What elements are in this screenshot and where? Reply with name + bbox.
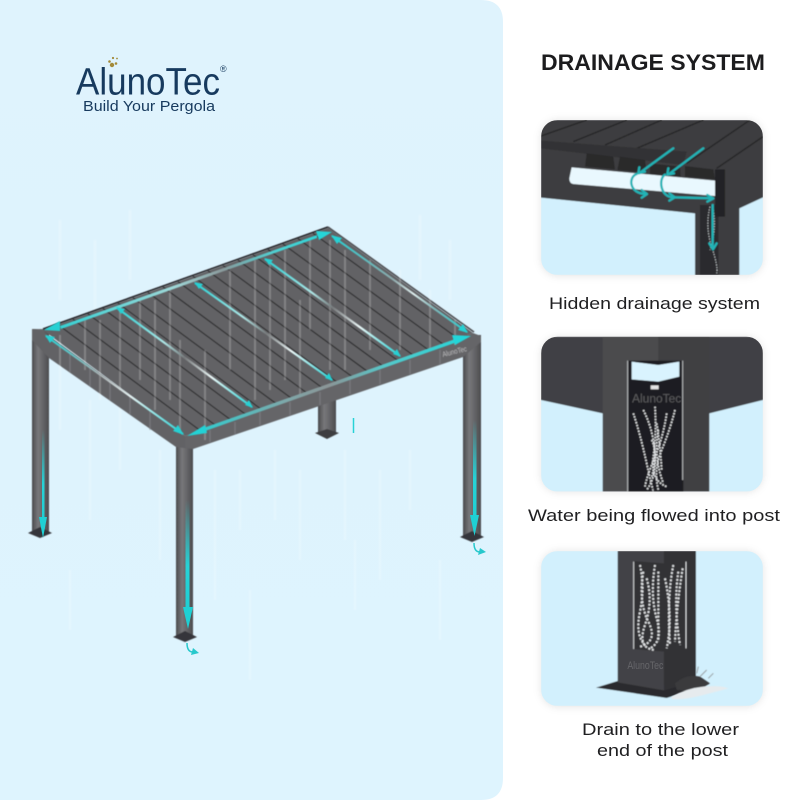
arrow: front edge [187,335,471,436]
arrow: back post drip [352,418,354,433]
arrow: slat channel three [264,258,401,357]
post window [634,561,664,652]
logo [76,57,227,115]
post [695,200,739,275]
screws [651,385,659,389]
rain over roof [60,240,455,440]
roof slats [58,233,458,431]
roof deck [43,228,473,436]
gutter lip [541,141,687,165]
registered mark: ® [220,64,227,74]
card artwork [541,120,763,275]
caption: hidden drainage: Hidden drainage system [549,295,760,313]
card background [541,551,763,706]
heading: DRAINAGE SYSTEM [541,50,765,75]
water stream [633,407,675,490]
water inside post [638,565,683,650]
arrow: right post [470,420,479,536]
beams [541,337,763,413]
card background [541,399,763,492]
post flow arrows [39,418,486,655]
left beam [32,329,193,449]
right post cap [715,169,725,217]
arrow: left post [39,430,47,538]
front post [173,438,197,642]
splash [672,667,728,699]
base plate [596,681,696,698]
background rain streaks [60,210,450,680]
pergola structure [28,227,484,642]
arrow: right outflow [474,543,486,555]
arrow: right edge [331,235,468,333]
caption: drain to lower end: end of the post [597,742,728,760]
panel: pergola illustration background [0,0,503,800]
arrow: front outflow [187,643,199,655]
post slot [627,361,683,492]
arrow: back edge [44,231,332,331]
slot logo: AlunoTec [632,392,681,406]
logo wordmark: AlunoTec [76,62,220,104]
arrow: slat channel one [116,307,253,408]
roof and beam mass [541,120,763,213]
panel: water flowing into post [541,337,763,492]
roof slats [541,120,763,168]
caption: drain to lower end: Drain to the lower [582,721,740,739]
slot edge highlights [628,361,683,492]
panel: hidden drainage detail [541,120,763,275]
back roof edge [43,227,328,329]
panel: drain at post base [541,551,763,706]
post left face [603,337,658,492]
arrow: front post [183,500,193,629]
post right face [658,337,709,492]
card shadows [541,120,763,707]
card artwork [541,551,763,706]
left post [28,329,52,538]
water stream [708,207,717,273]
logo tagline: Build Your Pergola [83,98,216,115]
back post [315,385,339,439]
slot sky window [632,362,679,382]
drain opening [569,167,715,196]
beam streaks [70,350,440,442]
gutter blocks [585,153,715,179]
card artwork [541,337,763,492]
post slot [700,205,718,275]
roof perimeter and channel arrows [44,231,471,436]
post logo: AlunoTec [627,660,664,672]
post left face [618,551,664,690]
caption: water into post: Water being flowed into post [528,507,780,525]
arrow: left edge [45,335,184,435]
right beam [185,333,481,449]
flow arrows [631,148,717,249]
right roof edge [328,227,474,332]
window edge highlights [634,562,686,649]
beam logo: AlunoTec [441,344,468,359]
arrow: slat channel two [194,282,333,381]
post right face [664,551,696,690]
right post [460,335,484,542]
logo dots [108,57,118,67]
caption: drain to lower end [582,721,740,760]
card background [541,196,763,275]
